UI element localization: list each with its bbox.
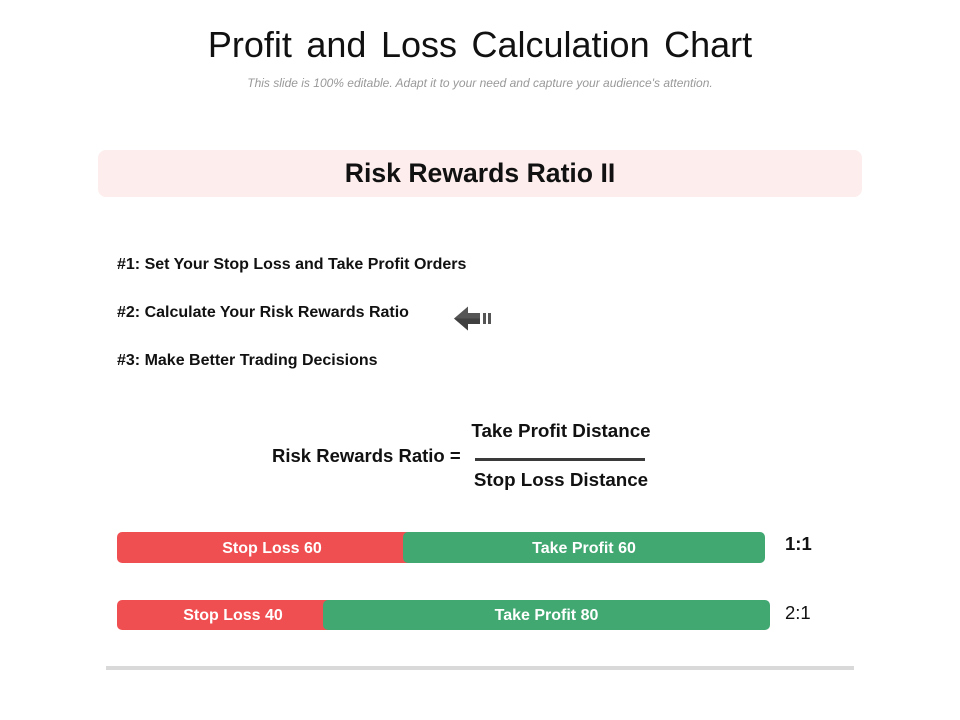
formula denominator: Stop Loss Distance [474, 469, 648, 490]
step 2: #2: Calculate Your Risk Rewards Ratio [117, 304, 409, 320]
bar 2: stop loss: Stop Loss 40 [183, 607, 283, 624]
ratio 2:1: 2:1 [785, 602, 811, 623]
bar 1: stop loss [117, 532, 427, 563]
bar 1: take profit [403, 532, 765, 563]
bar 2: stop loss [117, 600, 349, 630]
heading banner [98, 150, 862, 197]
subtitle: This slide is 100% editable. Adapt it to your need and capture your audience's attention. [247, 76, 713, 90]
formula numerator: Take Profit Distance [471, 420, 651, 441]
bar 2: take profit: Take Profit 80 [495, 607, 598, 624]
bar 1: take profit: Take Profit 60 [532, 540, 636, 557]
ratio 1:1: 1:1 [785, 533, 812, 554]
step 3: #3: Make Better Trading Decisions [117, 352, 378, 368]
footer line [106, 666, 854, 670]
formula label: Risk Rewards Ratio = [272, 445, 461, 466]
bar 2: take profit [323, 600, 770, 630]
icon: left arrow [454, 306, 491, 330]
bar 1: stop loss: Stop Loss 60 [222, 540, 322, 557]
formula fraction line [475, 458, 645, 461]
heading banner: Risk Rewards Ratio II [345, 158, 615, 188]
title: Profit and Loss Calculation Chart [208, 24, 752, 65]
step 1: #1: Set Your Stop Loss and Take Profit Orders [117, 256, 466, 272]
